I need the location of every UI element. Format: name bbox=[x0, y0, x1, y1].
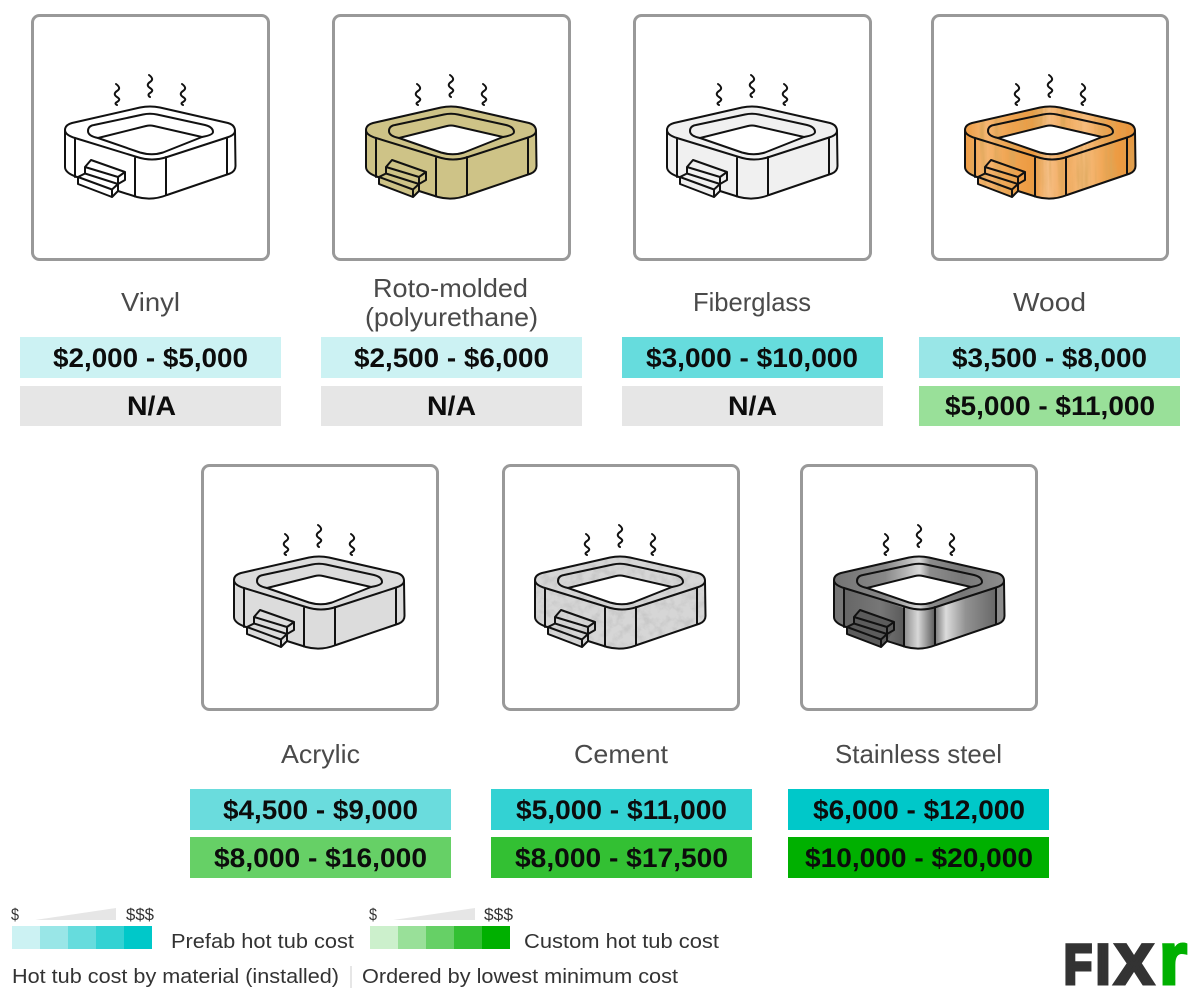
custom cost: roto-molded bbox=[321, 386, 582, 426]
prefab cost: acrylic bbox=[190, 789, 451, 830]
custom cost: fiberglass bbox=[622, 386, 883, 426]
custom cost: cement: $8,000 - $17,500 bbox=[515, 843, 728, 873]
custom cost: wood: $5,000 - $11,000 bbox=[945, 391, 1155, 421]
prefab cost: fiberglass: $3,000 - $10,000 bbox=[646, 343, 858, 373]
icon: roto-molded hot tub bbox=[366, 75, 536, 199]
label: roto-molded: Roto-molded bbox=[373, 273, 528, 303]
label: cement: Cement bbox=[574, 739, 669, 769]
custom cost: acrylic bbox=[190, 837, 451, 878]
legend: custom hot tub cost bbox=[369, 905, 719, 953]
custom cost: vinyl bbox=[20, 386, 281, 426]
custom cost: vinyl: N/A bbox=[127, 391, 176, 421]
custom cost: fiberglass: N/A bbox=[728, 391, 777, 421]
prefab cost: vinyl bbox=[20, 337, 281, 378]
image frame: roto-molded bbox=[334, 16, 570, 260]
image frame: cement bbox=[504, 466, 738, 710]
prefab cost: stainless steel: $6,000 - $12,000 bbox=[813, 795, 1025, 825]
logo: Fixr: I bbox=[1096, 932, 1110, 996]
label: fiberglass: Fiberglass bbox=[693, 287, 811, 317]
image frame: vinyl bbox=[32, 16, 268, 260]
panel: wood bbox=[919, 16, 1180, 426]
legend: prefab hot tub cost: $$$ bbox=[126, 905, 155, 924]
panel: acrylic bbox=[190, 466, 451, 878]
logo: Fixr bbox=[1064, 917, 1187, 997]
legend: custom hot tub cost: $ bbox=[369, 905, 377, 924]
icon: fiberglass hot tub bbox=[667, 75, 838, 199]
legend: custom hot tub cost: Custom hot tub cost bbox=[524, 931, 719, 953]
label: roto-molded: (polyurethane) bbox=[365, 302, 538, 332]
panel: vinyl bbox=[20, 16, 281, 426]
footer note bbox=[12, 966, 678, 988]
custom cost: cement bbox=[491, 837, 752, 878]
prefab cost: acrylic: $4,500 - $9,000 bbox=[223, 795, 418, 825]
prefab cost: wood: $3,500 - $8,000 bbox=[952, 343, 1147, 373]
prefab cost: roto-molded bbox=[321, 337, 582, 378]
prefab cost: vinyl: $2,000 - $5,000 bbox=[53, 343, 248, 373]
label: acrylic: Acrylic bbox=[281, 739, 360, 769]
footer note: Ordered by lowest minimum cost bbox=[362, 966, 678, 988]
icon: vinyl hot tub bbox=[65, 75, 236, 199]
prefab cost: fiberglass bbox=[622, 337, 883, 378]
image frame: fiberglass bbox=[634, 16, 870, 260]
custom cost: wood bbox=[919, 386, 1180, 426]
custom cost: roto-molded: N/A bbox=[427, 391, 476, 421]
logo: Fixr: X bbox=[1115, 932, 1153, 996]
legend: prefab hot tub cost: Prefab hot tub cost bbox=[171, 931, 354, 953]
logo: Fixr: F bbox=[1064, 932, 1092, 996]
legend: custom hot tub cost: $$$ bbox=[484, 905, 514, 924]
prefab cost: roto-molded: $2,500 - $6,000 bbox=[354, 343, 549, 373]
icon: wood hot tub bbox=[960, 75, 1140, 205]
icon: acrylic hot tub bbox=[234, 525, 404, 649]
prefab cost: stainless steel bbox=[788, 789, 1049, 830]
icon: cement hot tub bbox=[530, 525, 710, 655]
legend: prefab hot tub cost bbox=[11, 905, 354, 953]
panel: stainless steel bbox=[788, 466, 1049, 878]
image frame: wood bbox=[932, 16, 1168, 260]
prefab cost: cement: $5,000 - $11,000 bbox=[516, 795, 727, 825]
image frame: acrylic bbox=[202, 466, 438, 710]
image frame: stainless steel bbox=[802, 466, 1036, 710]
label: vinyl: Vinyl bbox=[121, 287, 180, 317]
prefab cost: wood bbox=[919, 337, 1180, 378]
custom cost: stainless steel bbox=[788, 837, 1049, 878]
custom cost: stainless steel: $10,000 - $20,000 bbox=[805, 843, 1033, 873]
panel: fiberglass bbox=[622, 16, 883, 426]
label: stainless steel: Stainless steel bbox=[835, 739, 1002, 769]
footer note: Hot tub cost by material (installed) bbox=[12, 966, 339, 988]
prefab cost: cement bbox=[491, 789, 752, 830]
panel: roto-molded bbox=[321, 16, 582, 426]
label: roto-molded bbox=[365, 273, 538, 332]
legend: prefab hot tub cost: $ bbox=[11, 905, 19, 924]
panel: cement bbox=[491, 466, 752, 878]
icon: stainless steel hot tub bbox=[834, 525, 1004, 649]
custom cost: acrylic: $8,000 - $16,000 bbox=[214, 843, 427, 873]
label: wood: Wood bbox=[1013, 287, 1086, 317]
